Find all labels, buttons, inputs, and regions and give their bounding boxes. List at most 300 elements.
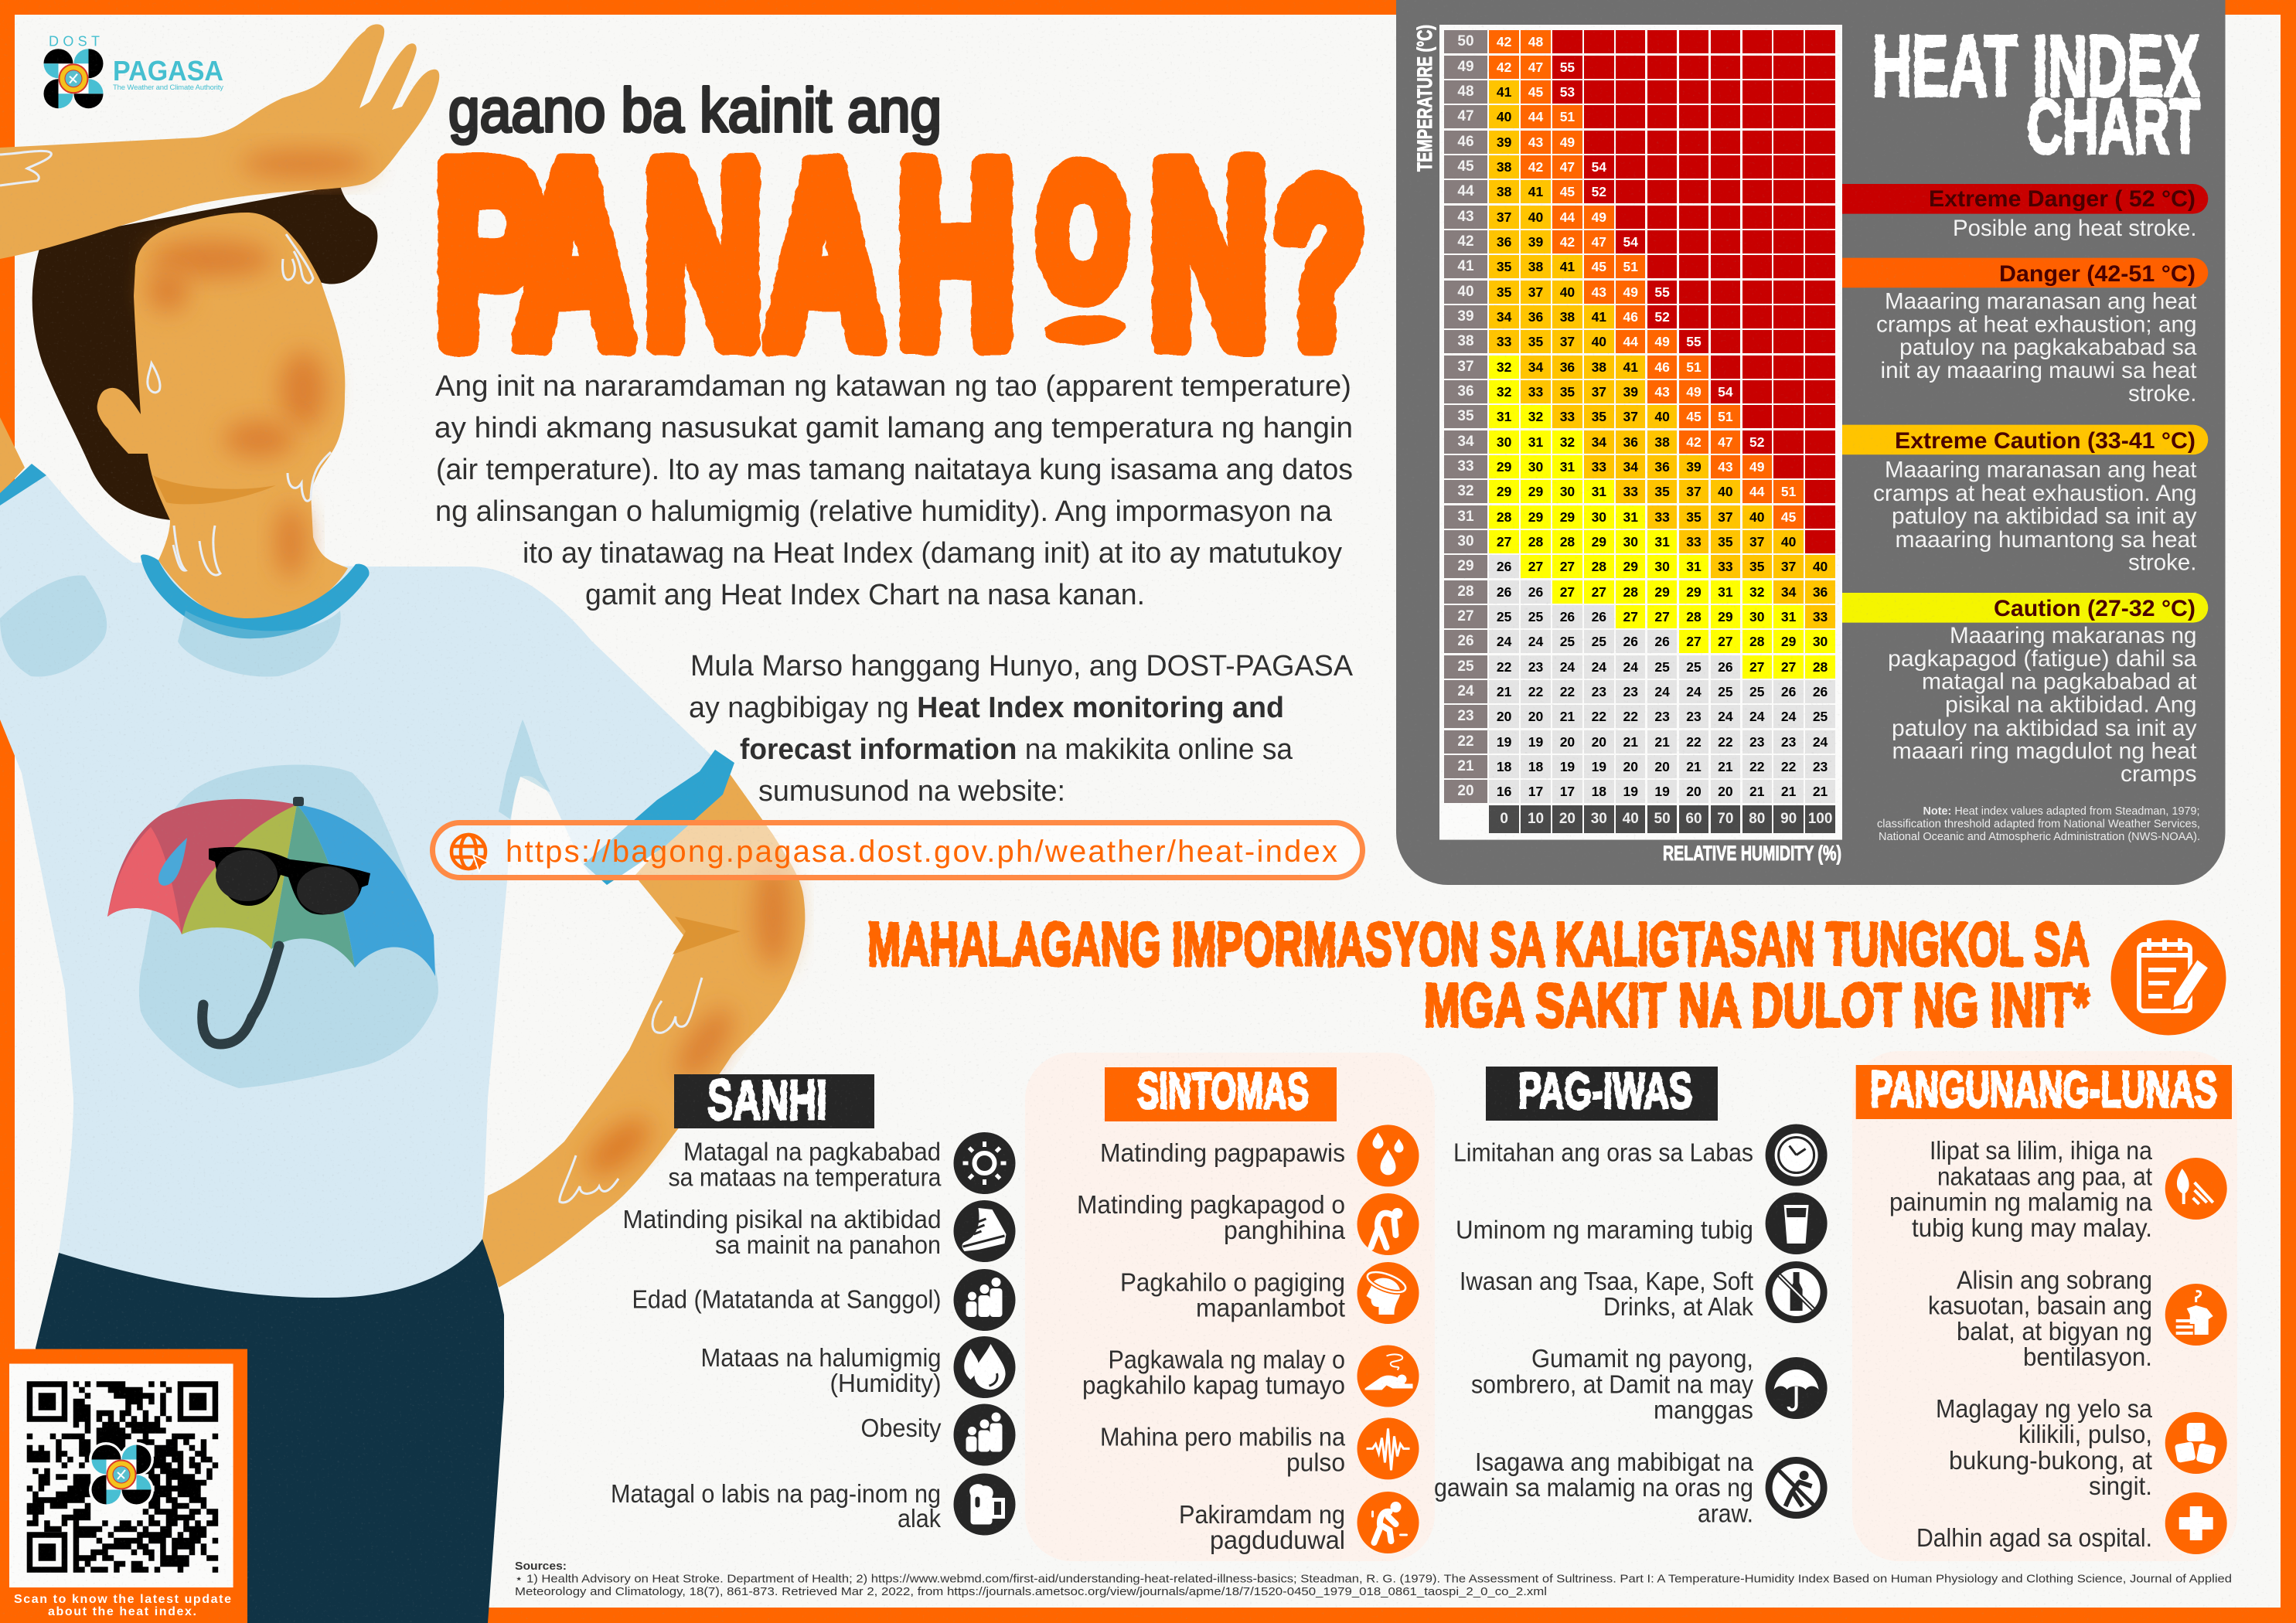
prevention text: sombrero, at Damit na may <box>1471 1370 1753 1399</box>
heat index table: 38 <box>1560 309 1575 325</box>
causes text: Edad (Matatanda at Sanggol) <box>632 1284 942 1314</box>
heat index table: 25 <box>1718 684 1733 699</box>
heat index table: 21 <box>1623 734 1638 750</box>
legend: caution: patuloy na aktibidad sa init ay <box>1892 716 2197 741</box>
heat index table: 28 <box>1623 584 1638 600</box>
heat index table: 33 <box>1654 509 1670 525</box>
symptoms text: mapanlambot <box>1196 1294 1345 1322</box>
intro paragraph: ito ay tinatawag na Heat Index (damang init) at ito ay matutukoy <box>523 537 1342 570</box>
prevention text: Gumamit ng payong, <box>1531 1344 1753 1373</box>
heat index table: 20 <box>1654 759 1670 774</box>
heat index table: 29 <box>1686 584 1702 600</box>
intro paragraph: ay hindi akmang nasusukat gamit lamang ang temperatura ng hangin <box>434 412 1353 444</box>
heat index table: 19 <box>1528 734 1543 750</box>
heat index table: 27 <box>1560 559 1575 574</box>
heat index table: 26 <box>1497 584 1511 600</box>
causes text: (Humidity) <box>830 1369 942 1397</box>
heat index table: 20 <box>1592 734 1606 750</box>
heat index table: 100 <box>1808 811 1832 827</box>
heat index table: 40 <box>1592 334 1606 349</box>
icon: globe with cursor <box>451 835 489 872</box>
legend: extreme danger <box>1842 184 2208 241</box>
sources <box>515 1560 2232 1598</box>
heat index table: 40 <box>1813 559 1828 574</box>
heat index table: 32 <box>1457 483 1474 499</box>
column: pangunang-lunas <box>1856 1060 2232 1554</box>
heat index table: 39 <box>1686 459 1702 475</box>
QR caption: Scan to know the latest update <box>14 1593 231 1606</box>
heat index table: 28 <box>1813 659 1828 675</box>
heat index table: 37 <box>1718 509 1733 525</box>
heat index table: 36 <box>1528 309 1543 325</box>
causes text: Matagal na pagkababad <box>683 1138 941 1165</box>
heat index table: 40 <box>1623 811 1639 827</box>
causes text: Obesity <box>861 1414 942 1442</box>
legend: caution: Maaaring makaranas ng <box>1950 623 2197 648</box>
heat index table: 54 <box>1718 384 1733 400</box>
heat index table: 21 <box>1781 784 1796 799</box>
intro paragraph: gamit ang Heat Index Chart na nasa kanan. <box>585 579 1145 611</box>
heat index table: 28 <box>1592 559 1606 574</box>
icon: humidity drops <box>954 1336 1016 1398</box>
heat index table: 22 <box>1592 709 1606 724</box>
first aid text: Ilipat sa lilim, ihiga na <box>1930 1136 2153 1165</box>
heat index table: 26 <box>1592 609 1606 624</box>
monitoring paragraph: Mula Marso hanggang Hunyo, ang DOST-PAGASA <box>690 650 1354 682</box>
legend: extreme danger: Extreme Danger ( 52 °C) <box>1929 186 2196 212</box>
heat index table: 23 <box>1781 734 1796 750</box>
heat index table: 38 <box>1528 259 1543 274</box>
symptoms text: Pagkawala ng malay o <box>1109 1345 1345 1374</box>
heat index table: 21 <box>1457 758 1474 774</box>
heat index table: 27 <box>1457 608 1474 624</box>
heat index table: 29 <box>1528 484 1543 499</box>
heat index table: 24 <box>1718 709 1733 724</box>
heat index table: 31 <box>1592 484 1606 499</box>
heat index table: 26 <box>1781 684 1796 699</box>
title: PANAHON?: O <box>1040 136 1126 330</box>
prevention text: Limitahan ang oras sa Labas <box>1453 1138 1753 1167</box>
axis title: relative humidity: RELATIVE HUMIDITY (%) <box>1663 842 1841 865</box>
heat index table: 20 <box>1497 709 1511 724</box>
heat index table: 19 <box>1497 734 1511 750</box>
heat index table: 42 <box>1497 60 1511 75</box>
monitoring paragraph: sumusunod na website: <box>758 775 1065 808</box>
heat index table: 18 <box>1497 759 1511 774</box>
first aid text: tubig kung may malay. <box>1912 1213 2152 1242</box>
heat index table: 27 <box>1497 534 1511 550</box>
heat index table: 22 <box>1749 759 1764 774</box>
heat index table: 19 <box>1560 759 1575 774</box>
heat index table: 41 <box>1528 184 1543 199</box>
chart note: Note: Heat index values adapted from Steadman, 1979; <box>1923 805 2200 818</box>
heat index table: 41 <box>1457 258 1474 274</box>
heat index table: 35 <box>1497 259 1511 274</box>
heat index table: 35 <box>1497 284 1511 300</box>
sources: ⋆ 1) Health Advisory on Heat Stroke. Department of Health; 2) https://www.webmd.com/first-aid/understanding-heat-related-illness-basics; Steadman, R. G. (1979). The Assessment of Sultriness. Part I: A Temperature-Humidity Index Based on Human Physiology and Clothing Science, Journal of Applied <box>515 1572 2232 1586</box>
heat index table: 34 <box>1592 434 1606 450</box>
heat index table: 33 <box>1592 459 1606 475</box>
sources: Meteorology and Climatology, 18(7), 861-873. Retrieved Mar 2, 2022, from https://journals.ametsoc.org/view/journals/apme/18/7/1520-0450_1979_018_0861_taospi_2_0_co_2.xml <box>515 1585 1547 1598</box>
heat index table: 60 <box>1685 811 1702 827</box>
heat index table: 51 <box>1781 484 1796 499</box>
title: gaano ba kainit ang: gaano ba kainit ang <box>448 76 942 145</box>
illustration: sweating man with umbrella shirt <box>0 24 805 1623</box>
heat index table: 23 <box>1623 684 1638 699</box>
heat index table: 55 <box>1654 284 1670 300</box>
heat index table: 37 <box>1623 409 1638 424</box>
heat index table: 49 <box>1686 384 1702 400</box>
heat index table: 41 <box>1623 359 1638 375</box>
heat index table: 24 <box>1654 684 1670 699</box>
heat index table: 29 <box>1457 558 1474 574</box>
legend: extreme caution: cramps at heat exhaustion. Ang <box>1873 481 2197 506</box>
prevention text: araw. <box>1698 1499 1753 1527</box>
heat index table: 40 <box>1457 284 1474 300</box>
chart heading <box>1872 18 2200 170</box>
heat index table: 27 <box>1528 559 1543 574</box>
icon: umbrella <box>1766 1357 1828 1419</box>
heat index table: 33 <box>1623 484 1638 499</box>
heading: pag-iwas: PAG-IWAS <box>1518 1062 1692 1119</box>
heat index table: 23 <box>1528 659 1543 675</box>
symptoms text: Pagkahilo o pagiging <box>1120 1267 1345 1297</box>
heat index table: 22 <box>1686 734 1702 750</box>
heat index table: 44 <box>1623 334 1638 349</box>
heat index table: 29 <box>1623 559 1638 574</box>
heat index table: 18 <box>1528 759 1543 774</box>
legend: extreme caution: patuloy na aktibidad sa init ay <box>1892 504 2197 529</box>
heat index table: 32 <box>1560 434 1575 450</box>
heat index table: 44 <box>1749 484 1764 499</box>
heat index table: 33 <box>1813 609 1828 624</box>
panel: heat index chart <box>1396 0 2225 885</box>
heat index table: 40 <box>1497 109 1511 124</box>
heat index table: 40 <box>1560 284 1575 300</box>
first aid text: bentilasyon. <box>2023 1342 2152 1371</box>
heat index table: 20 <box>1623 759 1638 774</box>
icon: pulse wave <box>1358 1417 1419 1479</box>
heat index table: 70 <box>1717 811 1733 827</box>
section heading <box>867 910 2090 1039</box>
heat index table: 24 <box>1497 634 1511 649</box>
legend: danger: init ay maaaring mauwi sa heat <box>1880 358 2197 383</box>
heat index table: 33 <box>1686 534 1702 550</box>
column: sanhi <box>611 1070 1016 1535</box>
heat index table: 54 <box>1623 234 1638 250</box>
heat index table: 24 <box>1457 683 1474 699</box>
intro paragraph: (air temperature). Ito ay mas tamang naitataya kung isasama ang datos <box>436 454 1353 486</box>
heat index table: 21 <box>1749 784 1764 799</box>
heat index table: 31 <box>1528 434 1543 450</box>
first aid text: nakataas ang paa, at <box>1937 1162 2152 1190</box>
heat index table: 45 <box>1592 259 1606 274</box>
heat index table: 21 <box>1718 759 1733 774</box>
causes text: Mataas na halumigmig <box>700 1343 942 1372</box>
heat index table: 22 <box>1781 759 1796 774</box>
heat index table: 35 <box>1749 559 1764 574</box>
first aid text: kilikili, pulso, <box>2018 1420 2152 1448</box>
heat index table: 46 <box>1654 359 1670 375</box>
heat index table: 20 <box>1718 784 1733 799</box>
heat index table: 30 <box>1528 459 1543 475</box>
heat index table: 41 <box>1497 84 1511 100</box>
heat index table: 21 <box>1497 684 1511 699</box>
title: PANAHON? <box>436 114 1364 396</box>
heat index table: 18 <box>1592 784 1606 799</box>
heat index table: 35 <box>1528 334 1543 349</box>
QR code modules <box>27 1381 218 1573</box>
heat index table: 46 <box>1623 309 1638 325</box>
heat index table: 41 <box>1560 259 1575 274</box>
heat index table: 41 <box>1592 309 1606 325</box>
heat index table: 45 <box>1457 158 1474 175</box>
heat index table: 22 <box>1623 709 1638 724</box>
prevention text: gawain sa malamig na oras ng <box>1434 1473 1753 1502</box>
heat index table: 22 <box>1560 684 1575 699</box>
icon: no drinks <box>1766 1261 1828 1323</box>
heat index table: 26 <box>1813 684 1828 699</box>
heat index table: 32 <box>1528 409 1543 424</box>
heat index table: 33 <box>1528 384 1543 400</box>
heat index table: 16 <box>1497 784 1511 799</box>
heat index table: 23 <box>1592 684 1606 699</box>
website pill <box>433 822 1362 878</box>
heat index table: 24 <box>1528 634 1543 649</box>
bent right arm <box>482 773 805 1288</box>
heat index table: 39 <box>1623 384 1638 400</box>
heat index table: 23 <box>1813 759 1828 774</box>
heat index table: 35 <box>1654 484 1670 499</box>
heat index table: 32 <box>1497 384 1511 400</box>
heat index table: 50 <box>1654 811 1671 827</box>
heat index table: 20 <box>1560 734 1575 750</box>
chart note <box>1877 805 2200 843</box>
first aid text: Alisin ang sobrang <box>1957 1266 2152 1294</box>
title: PANAHON?: N <box>1150 114 1268 396</box>
heat index table: 25 <box>1749 684 1764 699</box>
symptoms text: pagduduwal <box>1210 1526 1345 1554</box>
heat index table: 40 <box>1528 209 1543 225</box>
icon: fainted person <box>1358 1345 1419 1407</box>
heat index table: 44 <box>1528 109 1543 124</box>
heat index table: 21 <box>1654 734 1670 750</box>
heat index table: 90 <box>1780 811 1797 827</box>
heat index table: 32 <box>1497 359 1511 375</box>
heat index table: 20 <box>1528 709 1543 724</box>
heat index table: 19 <box>1623 784 1638 799</box>
chart note: classification threshold adapted from National Weather Services, <box>1877 818 2200 830</box>
heat index table: 38 <box>1497 184 1511 199</box>
legend: caution: pagkapagod (fatigue) dahil sa <box>1888 646 2197 672</box>
umbrella with sunglasses <box>107 797 435 1044</box>
heat index table: 30 <box>1497 434 1511 450</box>
heat index table: 38 <box>1497 159 1511 175</box>
heat index table: 22 <box>1718 734 1733 750</box>
heat index table: 29 <box>1528 509 1543 525</box>
logo mark <box>43 49 104 108</box>
heat index table: 40 <box>1718 484 1733 499</box>
legend: caution: cramps <box>2121 761 2197 787</box>
heat index table: 26 <box>1528 584 1543 600</box>
icon: notepad and pencil <box>2110 920 2226 1036</box>
heat index table: 29 <box>1718 609 1733 624</box>
heat index table: 34 <box>1457 434 1474 450</box>
heat index table: 29 <box>1497 459 1511 475</box>
heat index table: 22 <box>1528 684 1543 699</box>
column: sintomas <box>1077 1062 1419 1554</box>
icon: shade tree <box>2165 1158 2227 1220</box>
heat index table: 54 <box>1592 159 1606 175</box>
heat index table: 49 <box>1457 59 1474 75</box>
heat index table: 22 <box>1457 733 1474 750</box>
monitoring paragraph: ay nagbibigay ng Heat Index monitoring and <box>689 692 1284 724</box>
heat index table: 21 <box>1560 709 1575 724</box>
heat index table: 29 <box>1560 509 1575 525</box>
heat index table: 27 <box>1686 634 1702 649</box>
column: pag-iwas <box>1434 1062 1828 1527</box>
prevention text: Iwasan ang Tsaa, Kape, Soft <box>1460 1267 1753 1295</box>
icon: sweat drops <box>1358 1125 1419 1186</box>
heat index table: 25 <box>1686 659 1702 675</box>
heat index table: 37 <box>1560 334 1575 349</box>
heat index table: 24 <box>1749 709 1764 724</box>
heat index table: 37 <box>1749 534 1764 550</box>
heat index table: 38 <box>1457 333 1474 349</box>
legend: extreme caution: maaaring humantong sa heat <box>1896 527 2197 553</box>
symptoms text <box>1077 1138 1346 1554</box>
heat index table: 47 <box>1718 434 1733 450</box>
heat index table: 26 <box>1718 659 1733 675</box>
heat index table: 36 <box>1813 584 1828 600</box>
logo: DOST PAGASA: PAGASA <box>113 55 223 87</box>
icon: clock <box>1766 1124 1828 1186</box>
intro paragraph: ng alinsangan o halumigmig (relative humidity). Ang impormasyon na <box>435 495 1333 528</box>
legend: danger: patuloy na pagkakababad sa <box>1899 335 2197 360</box>
face and neck <box>97 213 348 622</box>
heat index table: 33 <box>1560 409 1575 424</box>
heat index table: 30 <box>1623 534 1638 550</box>
heat index table: 21 <box>1686 759 1702 774</box>
symptoms text: Matinding pagpapawis <box>1100 1138 1345 1167</box>
heat index table: 51 <box>1718 409 1733 424</box>
heat index table: 31 <box>1654 534 1670 550</box>
logo: DOST PAGASA <box>43 34 223 108</box>
heat index table: 31 <box>1457 509 1474 525</box>
heat index table: 52 <box>1654 309 1670 325</box>
symptoms text: Mahina pero mabilis na <box>1100 1422 1346 1451</box>
heat index table: 36 <box>1623 434 1638 450</box>
heat index table: 34 <box>1623 459 1638 475</box>
heat index table: 34 <box>1497 309 1511 325</box>
legend: danger: Maaaring maranasan ang heat <box>1885 289 2197 314</box>
heat index table: 31 <box>1560 459 1575 475</box>
legend: caution: Caution (27-32 °C) <box>1994 596 2196 621</box>
panel: pangunang-lunas background <box>1852 1051 2237 1561</box>
sweat stains on shirt <box>0 575 550 1088</box>
heat index table: 46 <box>1457 134 1474 150</box>
heat index table: 27 <box>1592 584 1606 600</box>
t-shirt <box>0 475 715 1298</box>
symptoms text: panghihina <box>1224 1216 1346 1244</box>
heat index table: 24 <box>1813 734 1828 750</box>
heat index table: 28 <box>1560 534 1575 550</box>
logo: DOST PAGASA: The Weather and Climate Authority <box>113 83 223 92</box>
heat index table: 35 <box>1686 509 1702 525</box>
heat index table: 23 <box>1749 734 1764 750</box>
heat index table: 27 <box>1623 609 1638 624</box>
heat index table: 55 <box>1686 334 1702 349</box>
prevention text <box>1434 1138 1754 1527</box>
heat index table: 39 <box>1528 234 1543 250</box>
symptoms text: pagkahilo kapag tumayo <box>1082 1371 1345 1399</box>
prevention text: Isagawa ang mabibigat na <box>1475 1448 1754 1476</box>
prevention text: manggas <box>1654 1396 1753 1424</box>
heat index table: 35 <box>1457 408 1474 424</box>
icon: running shoe <box>954 1200 1016 1262</box>
intro paragraph: Ang init na nararamdaman ng katawan ng tao (apparent temperature) <box>435 370 1351 403</box>
sleeve cuff <box>584 750 734 885</box>
heat index table: 28 <box>1457 584 1474 600</box>
heat index table: 39 <box>1497 134 1511 150</box>
heat index table: 29 <box>1497 484 1511 499</box>
heat index table: 26 <box>1654 634 1670 649</box>
heat index table: 21 <box>1813 784 1828 799</box>
heat index table: 51 <box>1686 359 1702 375</box>
legend: extreme caution <box>1842 425 2208 575</box>
first aid text: singit. <box>2089 1472 2152 1500</box>
heat index table: 52 <box>1749 434 1764 450</box>
heat index table: 28 <box>1497 509 1511 525</box>
heat index table: 30 <box>1560 484 1575 499</box>
legend: danger: Danger (42-51 °C) <box>1999 261 2196 287</box>
chart heading: CHART <box>2027 83 2200 170</box>
heat index table: 17 <box>1528 784 1543 799</box>
heat index table: 24 <box>1686 684 1702 699</box>
icon: nauseous person <box>1358 1492 1419 1553</box>
shirt collar <box>141 555 370 638</box>
first aid text: painumin ng malamig na <box>1889 1187 2153 1216</box>
heat index table: 19 <box>1654 784 1670 799</box>
heat index table: 28 <box>1528 534 1543 550</box>
title: PANAHON?: PANAH <box>436 114 1015 396</box>
prevention text: Drinks, at Alak <box>1603 1292 1753 1321</box>
icon: family <box>954 1269 1016 1331</box>
heat index table: 23 <box>1686 709 1702 724</box>
heat index table: 42 <box>1497 34 1511 49</box>
first aid text: Maglagay ng yelo sa <box>1936 1394 2153 1423</box>
first aid text: bukung-bukong, at <box>1949 1446 2152 1475</box>
heat index table: 22 <box>1497 659 1511 675</box>
heading: sintomas <box>1105 1062 1337 1121</box>
heat index table: 36 <box>1497 234 1511 250</box>
legend: caution <box>1842 593 2208 787</box>
causes text: Matagal o labis na pag-inom ng <box>611 1479 941 1508</box>
legend: danger <box>1842 258 2208 407</box>
heat index table: 37 <box>1457 359 1474 375</box>
intro paragraph <box>434 370 1353 611</box>
prevention text: Uminom ng maraming tubig <box>1456 1215 1753 1244</box>
heat index table: 25 <box>1813 709 1828 724</box>
heat index table: 35 <box>1560 384 1575 400</box>
heading: sintomas: SINTOMAS <box>1137 1062 1309 1119</box>
icon: beer mug <box>954 1473 1016 1535</box>
first aid text: kasuotan, basain ang <box>1928 1291 2152 1320</box>
heat index table: 42 <box>1560 234 1575 250</box>
icon: glass of water <box>1766 1193 1828 1254</box>
heat index table: 45 <box>1686 409 1702 424</box>
heat index table: 28 <box>1686 609 1702 624</box>
